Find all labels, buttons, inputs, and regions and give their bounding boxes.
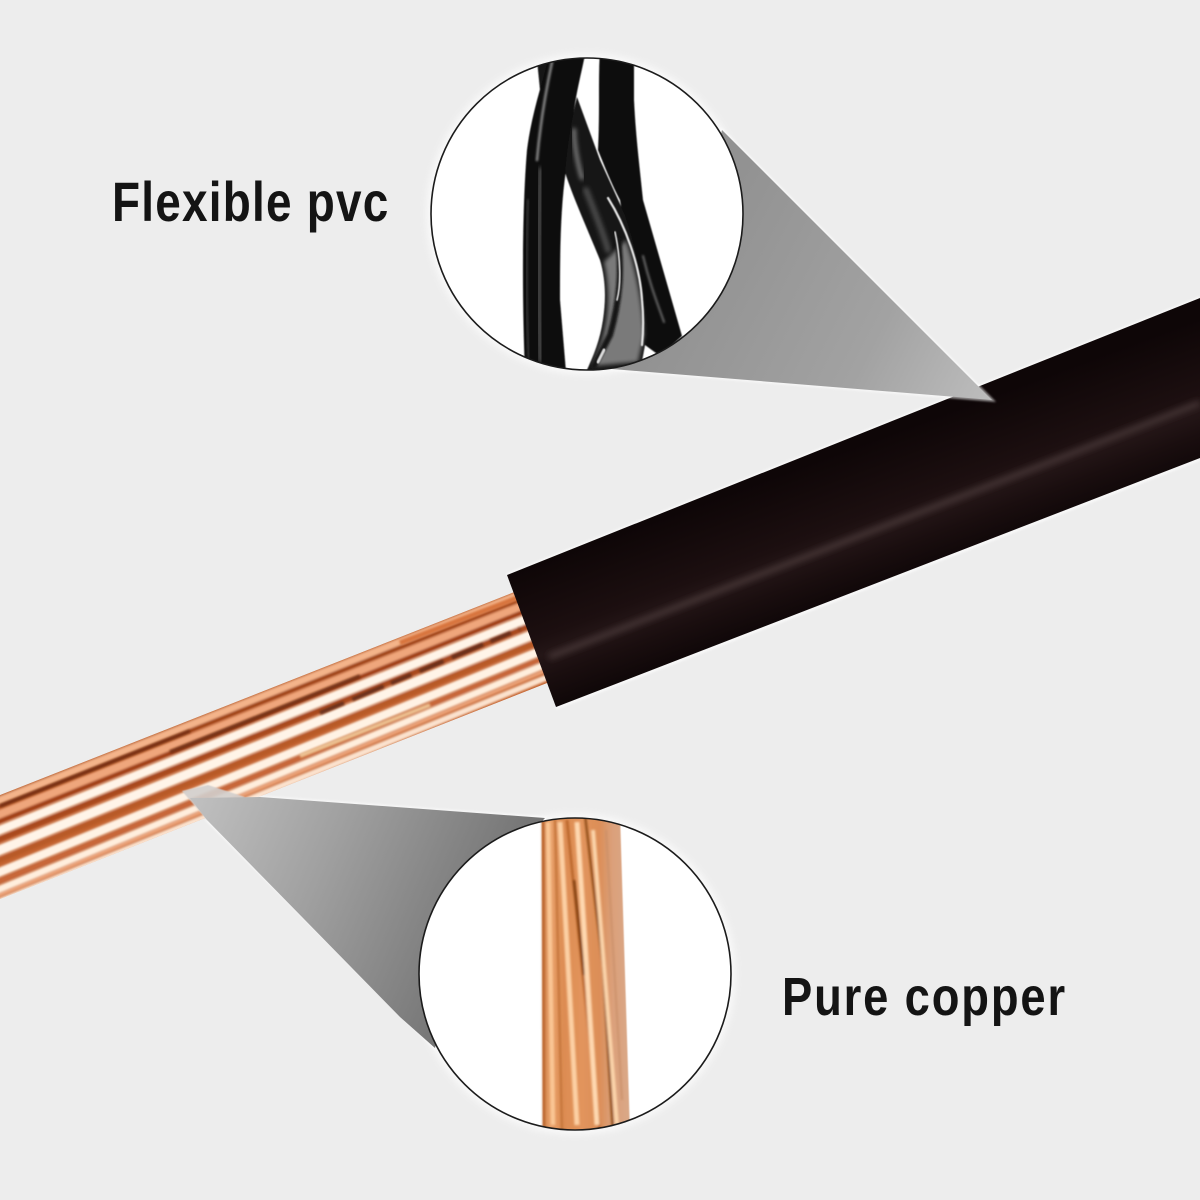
circle glows bbox=[415, 54, 747, 1134]
black pvc jacket bbox=[507, 298, 1200, 708]
label: Pure copper: Pure copper bbox=[782, 966, 1067, 1027]
callout cone: copper bbox=[182, 785, 545, 1048]
magnifier: flexible pvc cables bbox=[431, 50, 743, 372]
callout cone: pvc bbox=[612, 130, 992, 400]
magnifier: copper strands bbox=[419, 815, 731, 1133]
bare copper conductor bbox=[0, 592, 547, 899]
label: Flexible pvc: Flexible pvc bbox=[112, 171, 390, 233]
